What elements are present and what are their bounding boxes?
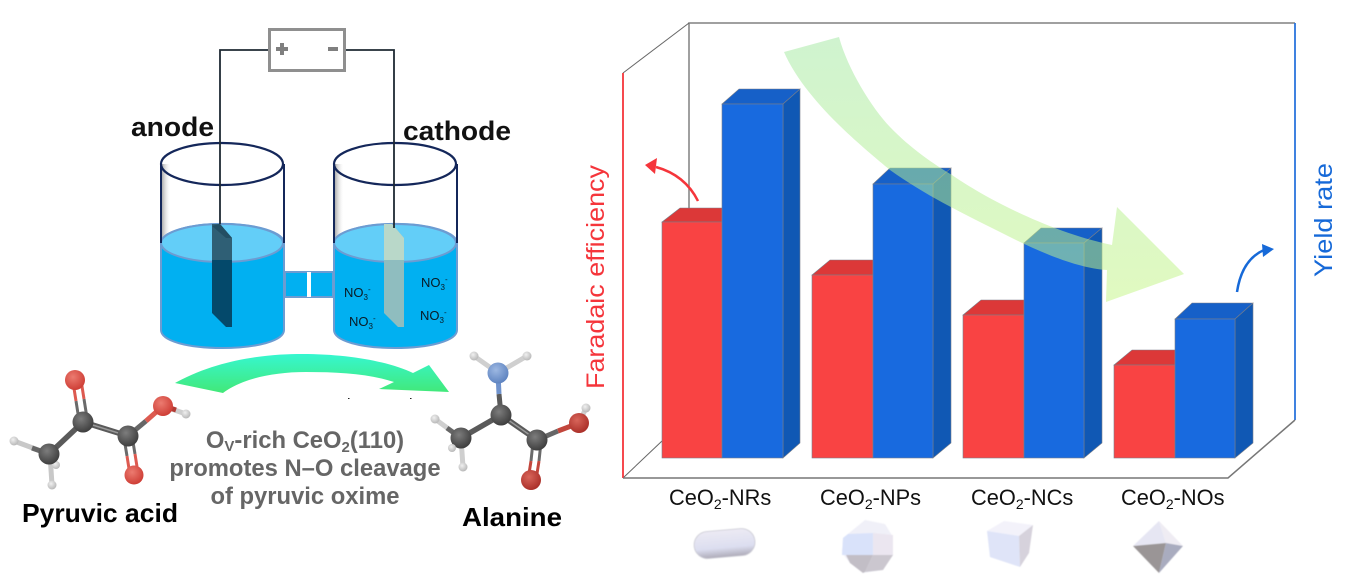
nitrate ions bbox=[344, 275, 448, 331]
category labels: 2 bbox=[714, 496, 722, 512]
arrow: pyruvic acid to alanine bbox=[175, 354, 449, 393]
category labels bbox=[669, 485, 1225, 512]
nitrate ions: - bbox=[368, 285, 371, 294]
category labels: CeO bbox=[1121, 485, 1166, 510]
shape: nano-octahedron bbox=[1133, 521, 1183, 573]
category labels: -NCs bbox=[1024, 485, 1073, 510]
red trend arrow bbox=[645, 158, 698, 201]
right beaker bbox=[334, 143, 457, 348]
chart frame back bbox=[623, 23, 1295, 478]
category labels: CeO bbox=[820, 485, 865, 510]
wires bbox=[220, 50, 394, 228]
catalyst description: -rich CeO bbox=[234, 427, 342, 454]
shape: nanocube bbox=[987, 521, 1033, 567]
cathode label: cathode bbox=[403, 116, 511, 146]
electrochemical cell bbox=[131, 30, 511, 348]
category labels: 2 bbox=[865, 496, 873, 512]
anode electrode bbox=[212, 224, 232, 327]
nitrate ions: 3 bbox=[368, 322, 374, 331]
nitrate ions: 3 bbox=[364, 293, 368, 302]
molecule: pyruvic acid bbox=[10, 370, 190, 490]
catalyst description: V bbox=[224, 438, 234, 455]
salt bridge bbox=[285, 272, 333, 297]
pyruvic acid label: Pyruvic acid bbox=[22, 498, 178, 528]
category labels: 2 bbox=[1016, 496, 1024, 512]
nitrate ions: NO bbox=[420, 308, 440, 323]
bars: CeO2-NOs bbox=[1114, 303, 1253, 458]
nitrate ions: 3 bbox=[440, 283, 446, 292]
nitrate ions: NO bbox=[344, 285, 364, 300]
category labels: -NPs bbox=[873, 485, 921, 510]
3D bar chart bbox=[582, 23, 1338, 573]
alanine label: Alanine bbox=[462, 502, 562, 532]
catalyst description: promotes N–O cleavage bbox=[169, 455, 441, 482]
catalyst description: 2 bbox=[342, 439, 350, 456]
bars: CeO2-NPs bbox=[812, 168, 951, 458]
category labels: CeO bbox=[669, 485, 714, 510]
category labels: -NOs bbox=[1174, 485, 1225, 510]
nitrate ions: 3 bbox=[440, 316, 444, 325]
anode label: anode bbox=[131, 112, 214, 142]
battery bbox=[270, 30, 344, 70]
y axis label: Yield rate: Yield rate bbox=[1310, 163, 1338, 277]
molecule: alanine bbox=[430, 352, 590, 490]
catalyst description: of pyruvic oxime bbox=[210, 483, 400, 510]
nitrate ions: NO bbox=[421, 275, 440, 290]
bars: CeO2-NCs bbox=[963, 228, 1102, 458]
chart frame axes bbox=[623, 23, 1295, 478]
trend arrow bbox=[784, 37, 1184, 302]
shape: nanoparticle bbox=[842, 520, 893, 573]
blue trend arrow bbox=[1237, 244, 1274, 292]
cathode electrode bbox=[384, 224, 404, 327]
y axis label: Faradaic efficiency: Faradaic efficiency bbox=[582, 164, 610, 389]
nitrate ions: - bbox=[445, 275, 448, 284]
category labels: CeO bbox=[971, 485, 1016, 510]
category labels: -NRs bbox=[722, 485, 771, 510]
nitrate ions: - bbox=[444, 308, 447, 317]
catalyst description: O bbox=[206, 427, 224, 454]
nitrate ions: NO bbox=[349, 314, 368, 329]
shape: nanorod bbox=[693, 527, 756, 560]
category labels: 2 bbox=[1166, 496, 1174, 512]
bars: CeO2-NRs bbox=[662, 89, 800, 458]
left beaker bbox=[161, 143, 284, 348]
catalyst description: (110) bbox=[350, 427, 404, 454]
nitrate ions: - bbox=[373, 314, 376, 323]
catalyst description bbox=[169, 427, 441, 510]
